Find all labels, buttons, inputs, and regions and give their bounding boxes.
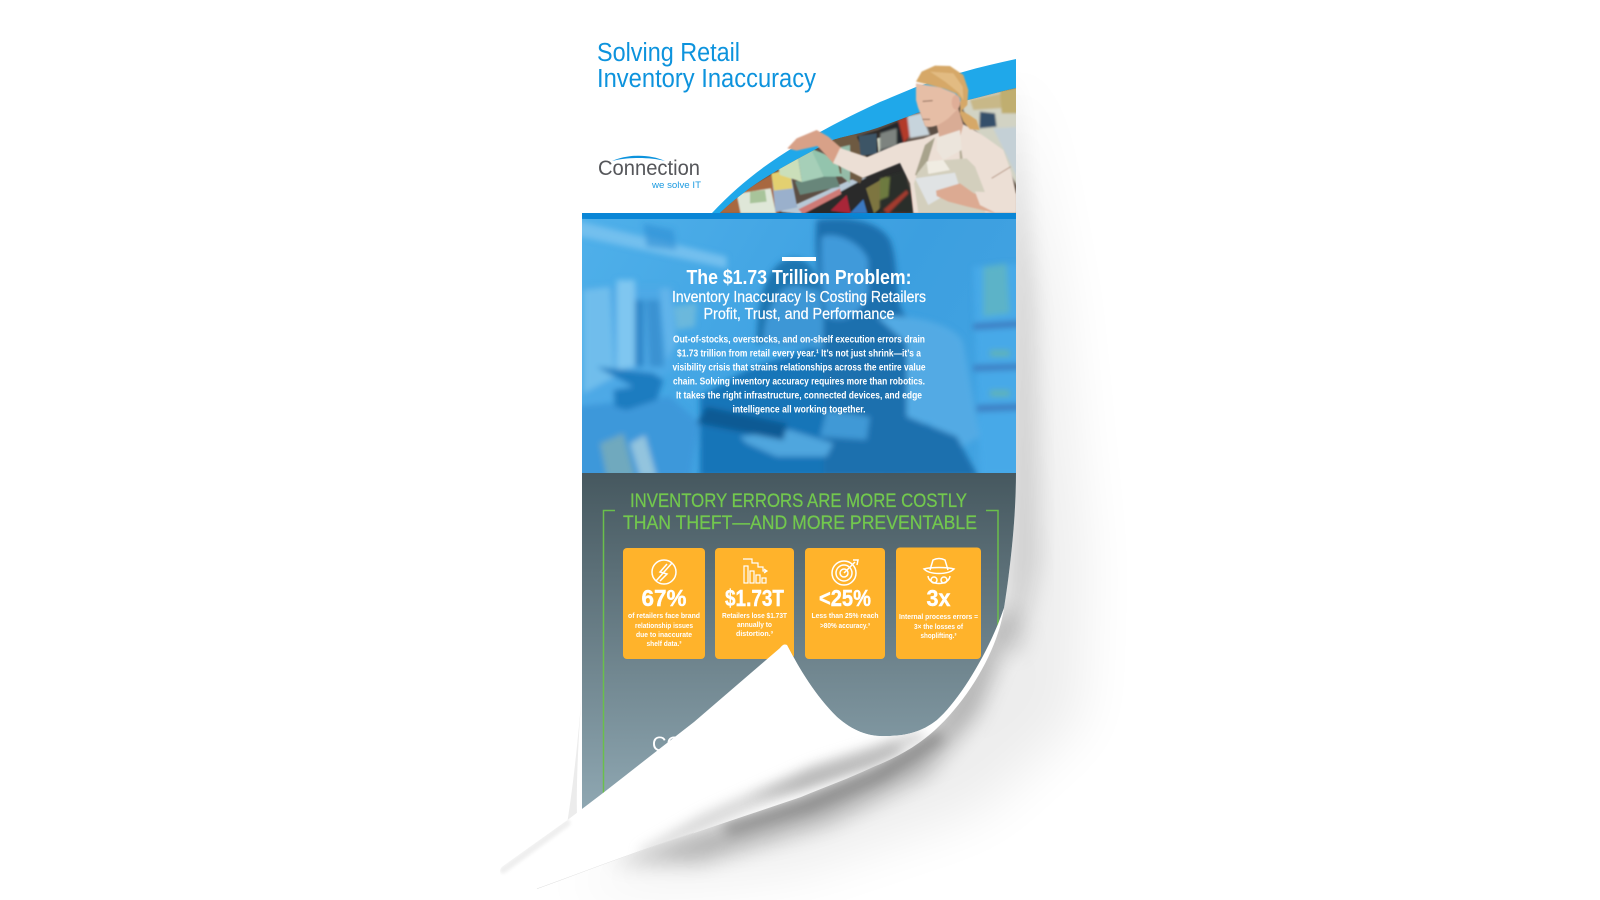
section heading — [623, 493, 976, 530]
logo: Connection we solve IT — [598, 156, 701, 191]
stat card: 3x: Internal process errors = — [899, 612, 978, 621]
stat card: <25%: Less than 25% reach — [812, 611, 878, 620]
stat card: <25%: <25% — [819, 585, 871, 611]
logo: Connection we solve IT: we solve IT — [651, 180, 701, 191]
blurred store background — [880, 87, 1020, 213]
heading accent bar — [782, 257, 816, 261]
curl inner shading — [640, 730, 930, 858]
stat card: <25% — [805, 548, 885, 659]
stat card: 67%: due to inaccurate — [636, 630, 692, 639]
panel heading and body copy: Out-of-stocks, overstocks, and on-shelf execution errors drain — [673, 334, 925, 346]
stat card: 67%: of retailers face brand — [628, 611, 700, 620]
panel heading and body copy: $1.73 trillion from retail every year.¹ It’s not just shrink—it’s a — [677, 349, 921, 360]
lower paper content — [573, 218, 1027, 843]
icon: declining bars — [743, 559, 767, 583]
panel heading and body copy: visibility crisis that strains relationships across the entire value — [672, 363, 926, 374]
stat card: $1.73T: $1.73T — [725, 585, 784, 611]
stat card: 3x: shoplifting.³ — [920, 631, 957, 640]
blue divider band — [582, 213, 1016, 219]
section heading: INVENTORY ERRORS ARE MORE COSTLY — [630, 490, 967, 512]
icon: broken link — [652, 560, 676, 584]
stat card: 3x: 3× the losses of — [914, 622, 964, 631]
stat card: 3x — [896, 548, 981, 659]
panel heading and body copy: chain. Solving inventory accuracy requires more than robotics. — [673, 377, 925, 388]
panel: inventory errors — [582, 473, 1016, 843]
worker hand reaching for product — [787, 130, 842, 164]
icon: target — [832, 560, 858, 585]
green bracket frame — [604, 510, 998, 795]
hair — [916, 66, 980, 130]
face — [916, 83, 960, 127]
panel heading and body copy: The $1.73 Trillion Problem: — [686, 267, 912, 289]
stat card: <25%: >80% accuracy.³ — [820, 621, 871, 630]
panel heading and body copy: intelligence all working together. — [732, 405, 866, 416]
stat card: $1.73T: annually to — [737, 620, 773, 629]
title: Solving Retail — [597, 39, 740, 67]
title — [597, 39, 816, 93]
panel heading and body copy: Inventory Inaccuracy Is Costing Retailers — [672, 289, 926, 306]
paper left edge sliver — [568, 690, 582, 821]
stat card: 67% — [623, 548, 705, 659]
stat card: $1.73T: Retailers lose $1.73T — [722, 611, 788, 620]
worker figure — [833, 66, 1017, 213]
panel: the $1.73 trillion problem — [573, 218, 1027, 477]
stat card: $1.73T: distortion.³ — [736, 629, 774, 638]
stat card: $1.73T — [715, 548, 794, 659]
header photo: retail worker stocking shelves — [710, 66, 1022, 217]
title: Inventory Inaccuracy — [597, 65, 816, 93]
panel heading and body copy — [672, 257, 926, 416]
stat card: 67%: relationship issues — [635, 621, 693, 630]
section heading: THAN THEFT—AND MORE PREVENTABLE — [623, 512, 977, 534]
panel heading and body copy: Profit, Trust, and Performance — [704, 306, 894, 323]
partially hidden sub-heading: CO — [652, 733, 682, 756]
page curl — [500, 608, 1004, 889]
neck — [937, 108, 963, 141]
tablet — [915, 173, 959, 205]
panel heading and body copy: It takes the right infrastructure, connected devices, and edge — [676, 391, 922, 402]
stat card: 67%: shelf data.³ — [646, 639, 682, 648]
paper sheet — [577, 0, 1016, 815]
icon: incognito hat and glasses — [924, 558, 954, 584]
shirt and sleeve — [833, 122, 1017, 213]
stat card: 3x: 3x — [926, 585, 951, 611]
blue swoosh band — [712, 59, 1016, 215]
stat card: 67%: 67% — [642, 585, 686, 611]
shelf products — [720, 128, 907, 213]
logo: Connection we solve IT: Connection — [598, 157, 700, 180]
panel background photo: two store associates — [573, 218, 1027, 477]
page drop shadow — [560, 60, 1085, 890]
apron — [915, 137, 935, 177]
